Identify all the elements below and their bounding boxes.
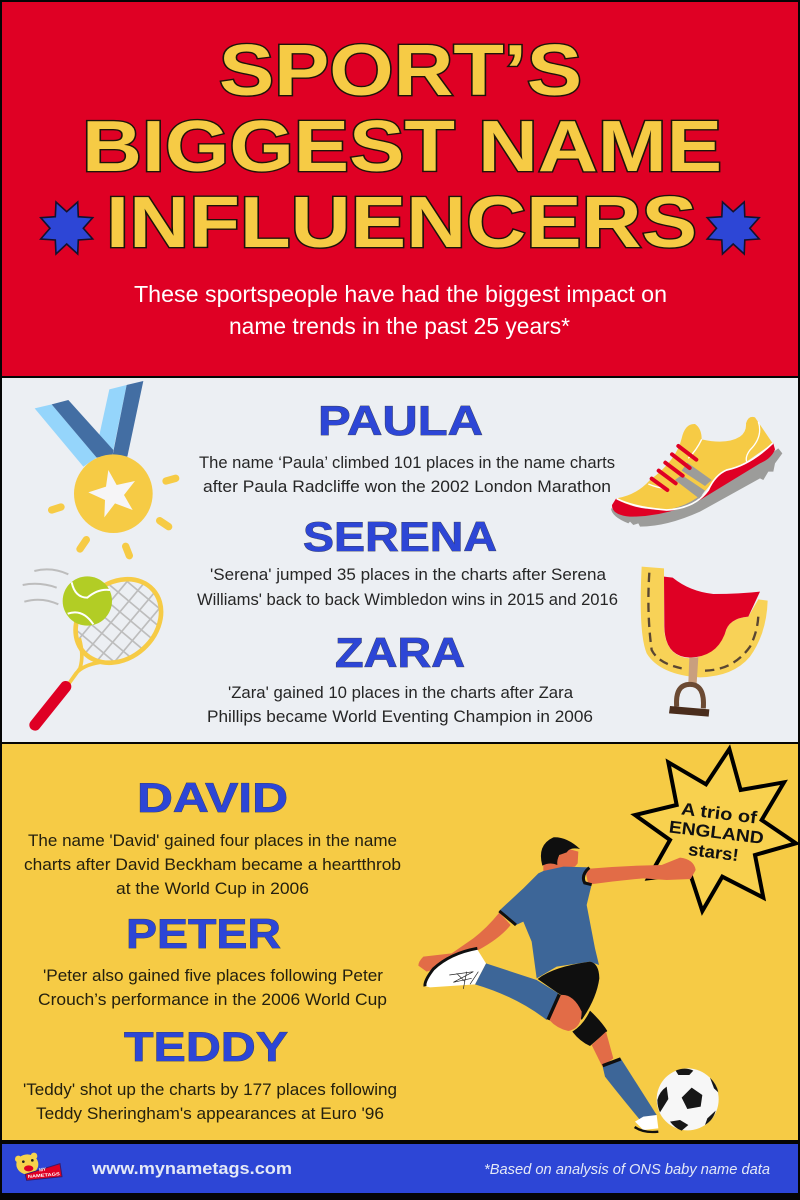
name: Serena: Williams' back to back Wimbledon wins in 2015 and 2016 <box>197 591 618 609</box>
panel: England stars <box>2 744 798 1140</box>
name: Paula: The name ‘Paula’ climbed 101 places in the name charts <box>199 454 615 472</box>
name: Peter <box>38 910 387 1009</box>
name: Paula <box>199 397 615 496</box>
name: Serena: 'Serena' jumped 35 places in the charts after Serena <box>210 566 607 584</box>
callout: trio of England stars: stars! <box>687 839 740 865</box>
icon: footballer kicking ball <box>418 837 719 1132</box>
name: Peter: 'Peter also gained five places following Peter <box>43 967 384 985</box>
icon: left blue star <box>41 202 93 254</box>
website url: www.mynametags.com <box>91 1159 292 1178</box>
icon: saddle <box>641 567 768 717</box>
name: David: The name 'David' gained four places in the name <box>28 832 397 850</box>
name: Paula: after Paula Radcliffe won the 2002 London Marathon <box>203 478 611 496</box>
name: Paula: PAULA <box>318 397 483 444</box>
name: Zara: 'Zara' gained 10 places in the charts after Zara <box>228 684 574 702</box>
icon: tennis racket and ball <box>22 568 164 731</box>
name: Peter: Crouch’s performance in the 2006 World Cup <box>38 991 387 1009</box>
title: INFLUENCERS <box>106 183 697 263</box>
name: Teddy: 'Teddy' shot up the charts by 177 places following <box>23 1081 397 1099</box>
name: Peter: PETER <box>126 910 281 957</box>
name: Serena <box>197 513 618 609</box>
icon: My Nametags logo: NAMETAGS <box>28 1171 60 1179</box>
title: SPORT’S <box>219 31 582 111</box>
name: David: DAVID <box>137 774 288 821</box>
icon: right blue star <box>707 202 759 254</box>
title: BIGGEST NAME <box>82 107 722 187</box>
icon: medal <box>35 381 176 556</box>
icon: My Nametags logo <box>15 1153 62 1180</box>
name: David: charts after David Beckham became a heartthrob <box>24 856 401 874</box>
panel: female athletes <box>2 378 798 742</box>
name: David: at the World Cup in 2006 <box>116 880 309 898</box>
subtitle: These sportspeople have had the biggest impact on <box>134 281 667 307</box>
subtitle <box>134 281 667 339</box>
name: Teddy: Teddy Sheringham's appearances at Euro '96 <box>36 1105 384 1123</box>
subtitle: name trends in the past 25 years* <box>229 313 570 339</box>
panel: footer <box>2 1144 798 1193</box>
footnote: *Based on analysis of ONS baby name data <box>484 1161 770 1178</box>
name: David <box>24 774 401 898</box>
name: Zara: Phillips became World Eventing Champion in 2006 <box>207 708 593 726</box>
icon: My Nametags logo: MY <box>39 1166 47 1173</box>
icon: running shoe <box>611 417 782 527</box>
name: Zara: ZARA <box>335 629 465 676</box>
name: Teddy: TEDDY <box>124 1023 288 1070</box>
panel: header <box>2 2 798 376</box>
name: Teddy <box>23 1023 397 1123</box>
callout: trio of England stars: ENGLAND <box>668 816 765 848</box>
name: Serena: SERENA <box>303 513 497 560</box>
callout: trio of England stars <box>635 749 796 911</box>
name: Zara <box>207 629 593 726</box>
title <box>82 31 722 263</box>
callout: trio of England stars: A trio of <box>680 798 758 828</box>
